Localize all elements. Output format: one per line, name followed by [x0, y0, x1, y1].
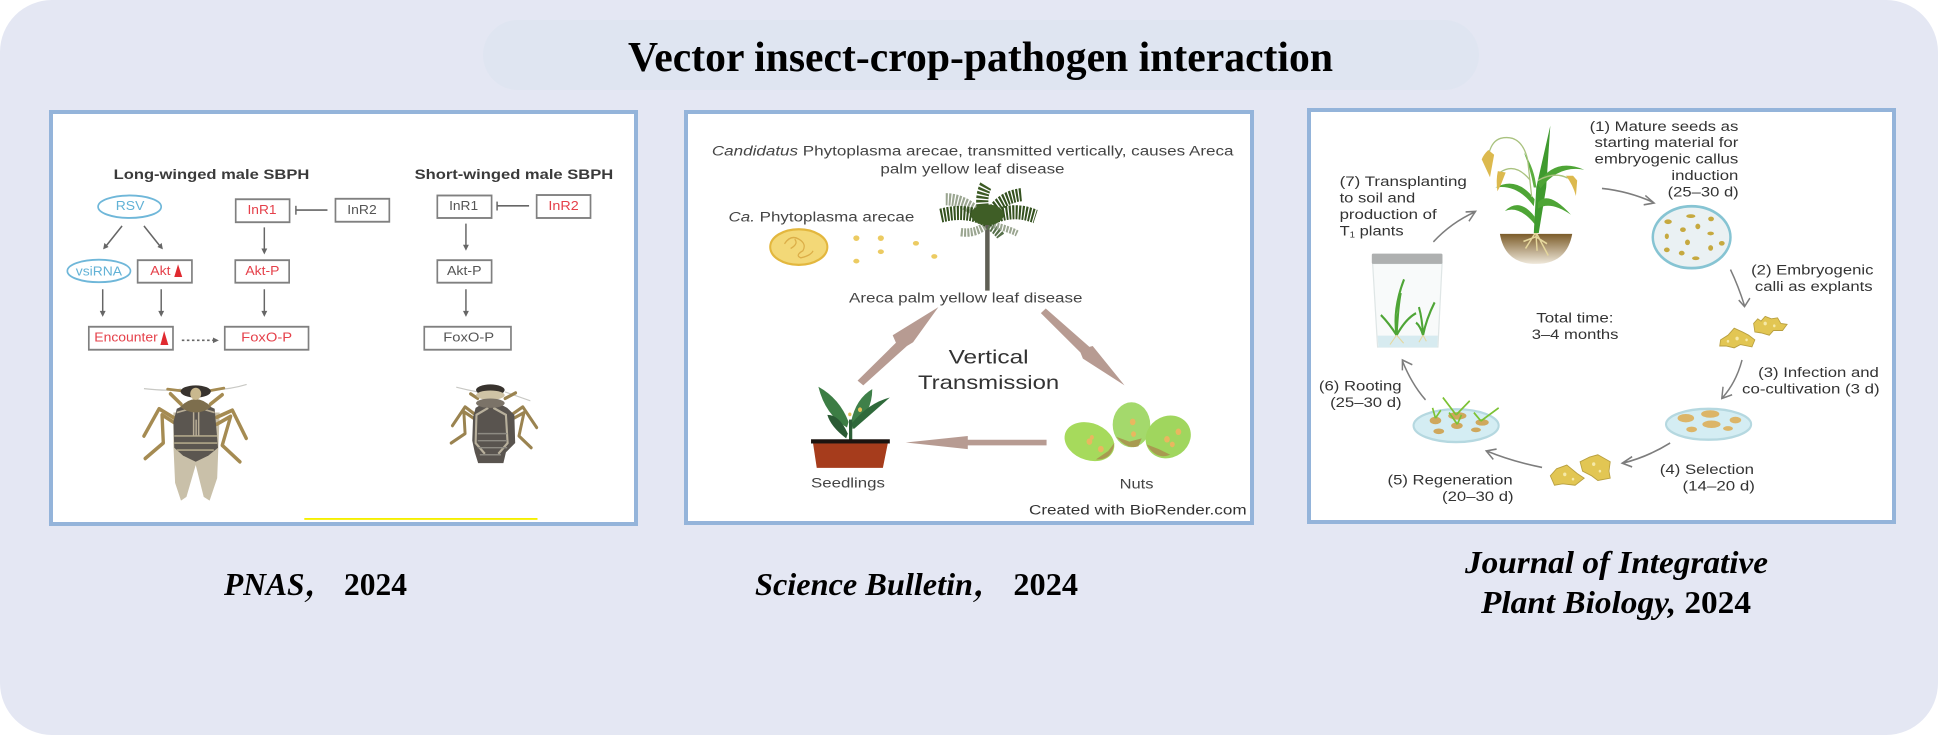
pathway: long-winged: InR1 — [247, 203, 277, 217]
description text: palm yellow leaf disease — [880, 161, 1065, 177]
title banner — [483, 20, 1479, 90]
pathway: long-winged: Akt-P — [245, 264, 279, 278]
icon: selected calli — [1550, 455, 1610, 485]
step 6 text: (6) Rooting — [1319, 378, 1402, 394]
arrow: step 5 — [1486, 449, 1542, 467]
pathway: long-winged: InR2 — [347, 203, 377, 217]
label: nuts: Nuts — [1120, 476, 1154, 492]
description text: Candidatus Phytoplasma arecae, transmitted vertically, causes Areca — [712, 143, 1235, 159]
step 7 text: production of — [1340, 206, 1437, 222]
icon: areca palm — [941, 186, 1036, 291]
panel: rice transformation workflow — [1309, 110, 1894, 522]
step 4 text: (14–20 d) — [1683, 478, 1755, 494]
step 3 text: co-cultivation (3 d) — [1742, 381, 1880, 397]
pathway: short-winged: Akt-P — [447, 264, 482, 278]
step 3 text — [1742, 364, 1880, 397]
label: vertical transmission: Transmission — [918, 371, 1059, 393]
step 7 text: to soil and — [1340, 190, 1415, 206]
icon: culture jar — [1372, 254, 1442, 347]
label: vertical transmission — [918, 345, 1059, 393]
pathway: short-winged: FoxO-P — [443, 330, 494, 345]
arrow: step 4 — [1622, 443, 1670, 467]
label: seedlings: Seedlings — [811, 475, 885, 491]
icon: seed dish — [1653, 206, 1730, 268]
description text — [712, 143, 1235, 177]
step 6 text — [1319, 378, 1402, 410]
panel: SBPH wing-morph pathways — [51, 112, 636, 524]
caption: PNAS: PNAS， 2024 — [223, 566, 407, 603]
icon: long-winged planthopper — [144, 384, 247, 501]
icon: rice plant — [1482, 126, 1584, 264]
pathway: long-winged: Akt — [150, 264, 171, 278]
icon: short-winged planthopper — [451, 384, 537, 463]
label: vertical transmission: Vertical — [949, 345, 1029, 368]
step 1 text: (25–30 d) — [1668, 184, 1739, 200]
icon: infected nuts — [1061, 402, 1195, 467]
label: palm disease: Areca palm yellow leaf disease — [849, 290, 1082, 306]
arrow: palm to nuts — [1041, 308, 1125, 385]
step 1 text: starting material for — [1595, 134, 1739, 150]
step 1 text: (1) Mature seeds as — [1590, 118, 1738, 134]
total time — [1532, 310, 1618, 342]
arrow: seedlings to palm — [858, 307, 938, 385]
step 1 text: embryogenic callus — [1595, 151, 1738, 167]
step 3 text: (3) Infection and — [1758, 364, 1879, 380]
step 6 text: (25–30 d) — [1330, 394, 1402, 410]
pathway: long-winged: vsiRNA — [76, 264, 123, 279]
step 5 text: (20–30 d) — [1442, 488, 1514, 504]
total time: 3–4 months — [1532, 326, 1618, 342]
pathway: short-winged: InR1 — [449, 198, 478, 213]
pathway: short-winged — [424, 195, 591, 350]
step 1 text: induction — [1671, 167, 1738, 183]
caption: Journal of Integrative Plant Biology — [1464, 544, 1768, 620]
step 1 text — [1590, 118, 1739, 200]
icon: phytoplasma cell — [770, 229, 827, 265]
pathway: long-winged: Encounter — [94, 330, 158, 345]
step 2 text: calli as explants — [1755, 278, 1873, 294]
icon: released phytoplasma dots — [853, 235, 937, 263]
total time: Total time: — [1536, 310, 1614, 326]
accent line — [304, 517, 537, 521]
step 7 text: 1 — [1350, 230, 1355, 240]
heading: short-winged: Short-winged male SBPH — [415, 166, 613, 182]
pathway: short-winged: InR2 — [548, 198, 579, 213]
icon: regeneration dish — [1414, 398, 1499, 442]
step 4 text — [1660, 461, 1755, 494]
step 7 text: T — [1340, 223, 1347, 239]
heading: long-winged: Long-winged male SBPH — [114, 166, 309, 182]
step 7 text: plants — [1355, 223, 1404, 239]
arrow: step 1 — [1602, 188, 1654, 205]
icon: embryogenic calli — [1720, 316, 1787, 348]
arrow: step 2 — [1730, 270, 1750, 307]
panel: vertical transmission cycle — [686, 112, 1252, 523]
caption: Science Bulletin: Science Bulletin， 2024 — [755, 566, 1078, 603]
step 5 text: (5) Regeneration — [1388, 472, 1513, 488]
step 7 text — [1340, 173, 1467, 240]
pathway: long-winged: FoxO-P — [241, 330, 292, 345]
caption: Journal of Integrative Plant Biology: Journal of Integrative — [1464, 544, 1768, 580]
pathway: long-winged: RSV — [116, 198, 145, 213]
arrow: nuts to seedlings — [906, 436, 1047, 449]
icon: co-cultivation dish — [1666, 409, 1751, 440]
pathway: long-winged — [67, 195, 389, 350]
step 7 text: (7) Transplanting — [1340, 173, 1467, 189]
step 4 text: (4) Selection — [1660, 461, 1754, 477]
step 2 text — [1751, 262, 1874, 294]
arrow: step 6 — [1402, 360, 1426, 400]
credit: Created with BioRender.com — [1029, 501, 1247, 517]
step 2 text: (2) Embryogenic — [1751, 262, 1874, 278]
arrow: step 7 — [1433, 211, 1476, 242]
title: Vector insect-crop-pathogen interaction — [628, 35, 1333, 81]
step 5 text — [1388, 472, 1514, 504]
icon: seedling in pot — [811, 387, 890, 468]
arrow: step 3 — [1722, 360, 1742, 398]
label: pathogen: Ca. Phytoplasma arecae — [729, 208, 914, 224]
caption: Journal of Integrative Plant Biology: Plant Biology, 2024 — [1480, 584, 1751, 620]
